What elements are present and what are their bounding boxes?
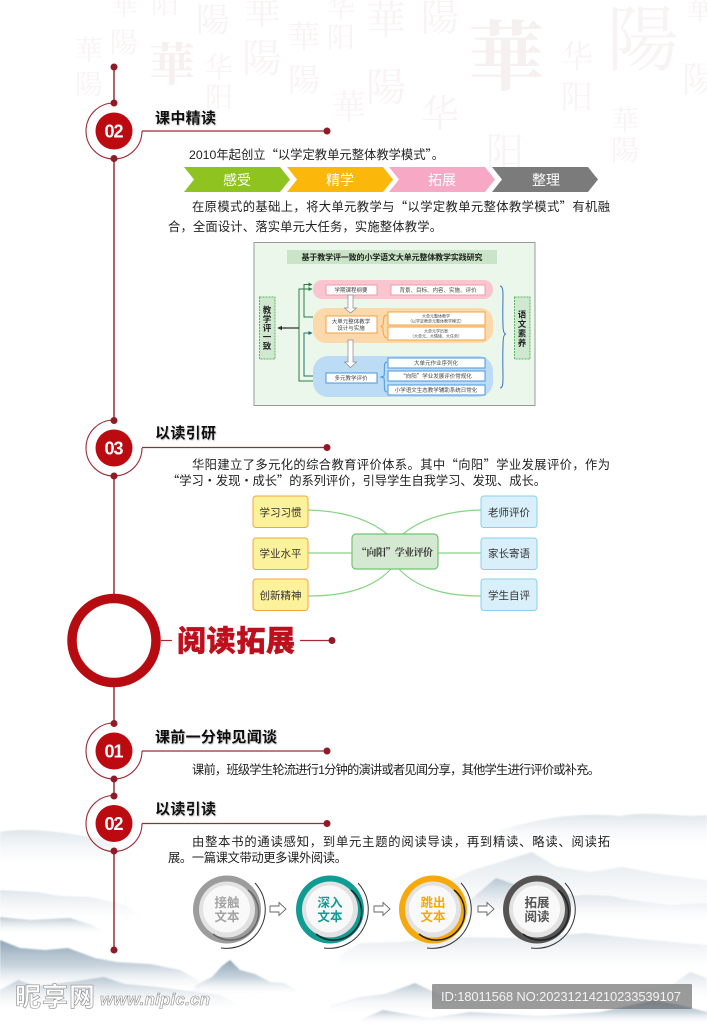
background: calligraphy characters: 陽 [288, 62, 320, 98]
mind map: 向阳学业评价: 家长寄语 [488, 547, 530, 560]
background: calligraphy characters: 華 [468, 17, 544, 101]
chevron process: 拓展 [428, 172, 456, 188]
diagram: 大单元整体教学实践研究: “向阳”学业发展评价常规化 [400, 372, 472, 380]
reading steps: four rings: 文本 [420, 909, 446, 924]
diagram: 大单元整体教学实践研究: 一 [263, 332, 272, 342]
diagram: 大单元整体教学实践研究: 文 [518, 319, 527, 329]
reading steps: four rings: 阅读 [524, 909, 550, 924]
reading steps: four rings: 拓展 [524, 895, 550, 910]
chevron process: 整理 [532, 172, 560, 188]
section marker: 课前一分钟见闻谈 01 [86, 720, 330, 782]
text: 整本书通读 [168, 834, 610, 865]
text: 课前演讲: 课前，班级学生轮流进行1分钟的演讲或者见闻分享，其他学生进行评价或补充。 [192, 762, 600, 777]
text: 2010年起创立: 2010年起创立“以学定教单元整体教学模式”。 [189, 145, 444, 163]
diagram: 大单元整体教学实践研究: 大单元作业序列化 [414, 359, 458, 367]
background: calligraphy characters: 華 [75, 35, 103, 67]
diagram: 大单元整体教学实践研究: 设计与实施 [337, 324, 365, 332]
background: calligraphy characters: 华 [561, 39, 593, 75]
reading steps: four rings [193, 876, 575, 948]
diagram: 大单元整体教学实践研究: （以学定教单元整体教学模式） [408, 318, 464, 324]
background: calligraphy characters: 陽 [607, 1, 679, 81]
diagram: 大单元整体教学实践研究: 基于教学评一致的小学语文大单元整体教学实践研究 [302, 252, 482, 262]
background: calligraphy characters: 陽 [366, 65, 406, 110]
background: calligraphy characters: 阳 [327, 23, 355, 54]
diagram: 大单元整体教学实践研究: 小学语文生态教学辅助系统日常化 [395, 386, 478, 394]
chevron process: 精学 [326, 172, 354, 188]
diagram: 大单元整体教学实践研究: 素 [518, 328, 527, 338]
watermark: image id [432, 984, 692, 1009]
watermark: nipic logo [15, 982, 210, 1012]
background: calligraphy characters: 阳 [205, 83, 233, 114]
section marker: 以读引研 03: 03 [104, 438, 124, 458]
section marker: 课中精读 02: 02 [104, 122, 124, 142]
reading steps: four rings: 接触 [214, 895, 240, 910]
diagram: 大单元整体教学实践研究: （大单元、大情境、大任务） [410, 332, 462, 338]
diagram: 大单元整体教学实践研究: 多元教学评价 [334, 374, 368, 382]
timeline spine [110, 64, 118, 954]
background: calligraphy characters: 陽 [110, 28, 138, 59]
reading steps: four rings: 深入 [317, 895, 343, 910]
chevron process [184, 167, 598, 192]
text: 评价体系 [167, 455, 610, 489]
heading: 课前一分钟见闻谈: 课前一分钟见闻谈 [155, 728, 277, 746]
background: calligraphy characters: 陽 [242, 36, 282, 81]
background: calligraphy characters: 華 [332, 89, 366, 127]
chevron process: 感受 [223, 172, 251, 188]
background: calligraphy characters: 阳 [561, 79, 593, 115]
diagram: 大单元整体教学实践研究: 大单元学历案 [424, 328, 448, 334]
text: 原模式融合: 在原模式的基础上，将大单元教学与“以学定教单元整体教学模式”有机融 [192, 197, 610, 215]
heading: 课中精读: 课中精读 [155, 109, 216, 127]
diagram: 大单元整体教学实践研究: 语 [518, 310, 527, 320]
watermark: image id: ID:18011568 NO:20231214210233539107 [441, 989, 681, 1004]
heading: 以读引读: 以读引读 [155, 801, 216, 818]
watermark: nipic logo: 昵享网 [15, 982, 95, 1012]
background: calligraphy characters [75, 0, 707, 174]
section marker: 以读引读 02: 02 [104, 814, 124, 834]
mind map: 向阳学业评价: 学生自评 [488, 589, 530, 602]
section marker: 以读引研 03 [86, 417, 330, 480]
background: calligraphy characters: 華 [288, 19, 320, 55]
background: ink mountains [0, 814, 707, 1024]
watermark: nipic logo: www.nipic.cn [100, 990, 210, 1009]
section marker: 课前一分钟见闻谈 01: 01 [104, 742, 124, 762]
diagram: 大单元整体教学实践研究: 大单元整体教学 [332, 318, 371, 326]
diagram: 大单元整体教学实践研究: 养 [518, 338, 527, 348]
background: calligraphy characters: 阳 [486, 132, 524, 174]
reading steps: four rings: 文本 [317, 909, 343, 924]
text: 整本书通读: 展。一篇课文带动更多课外阅读。 [168, 850, 347, 865]
diagram: 大单元整体教学实践研究 [254, 242, 535, 406]
diagram: 大单元整体教学实践研究: 背景、目标、内容、实施、评价 [399, 286, 477, 294]
mind map: 向阳学业评价: 创新精神 [260, 589, 302, 602]
background: calligraphy characters: 華 [611, 105, 639, 137]
section marker: 课中精读 02 [86, 100, 330, 162]
mind map: 向阳学业评价: 老师评价 [488, 506, 530, 519]
reading steps: four rings: 跳出 [420, 895, 446, 910]
background: calligraphy characters: 陽 [611, 136, 639, 167]
reading steps: four rings: 文本 [214, 909, 240, 924]
diagram: 大单元整体教学实践研究: 评 [263, 323, 272, 333]
heading: 阅读拓展: 阅读拓展 [177, 625, 295, 658]
section ring: 阅读拓展 [72, 598, 336, 682]
mind map: 向阳学业评价: 学习习惯 [260, 506, 302, 519]
diagram: 大单元整体教学实践研究: 教 [263, 305, 272, 315]
diagram: 大单元整体教学实践研究: 学 [263, 314, 272, 324]
background: calligraphy characters: 陽 [75, 70, 103, 101]
text: 原模式融合 [168, 197, 610, 234]
text: 评价体系: 华阳建立了多元化的综合教育评价体系。其中“向阳”学业发展评价，作为 [192, 455, 610, 473]
mind map: 向阳学业评价: 学业水平 [260, 547, 302, 560]
text: 评价体系: “学习・发现・成长”的系列评价，引导学生自我学习、发现、成长。 [167, 471, 546, 489]
diagram: 大单元整体教学实践研究: 学期课程纲要 [334, 286, 368, 294]
diagram: 大单元整体教学实践研究: 大单元整体教学 [422, 312, 450, 318]
diagram: 大单元整体教学实践研究: 致 [263, 341, 272, 351]
text: 整本书通读: 由整本书的通读感知，到单元主题的阅读导读，再到精读、略读、阅读拓 [192, 834, 610, 849]
background: calligraphy characters: 华 [205, 52, 233, 84]
heading: 以读引研: 以读引研 [155, 425, 216, 442]
background: calligraphy characters: 華 [149, 40, 195, 91]
background: calligraphy characters: 陽 [196, 3, 230, 40]
text: 原模式融合: 合，全面设计、落实单元大任务，实施整体教学。 [168, 219, 442, 234]
background: calligraphy characters: 华 [421, 94, 459, 136]
mind map: 向阳学业评价 [253, 496, 537, 610]
section marker: 以读引读 02 [86, 792, 331, 854]
mind map: 向阳学业评价: “向阳”学业评价 [357, 544, 433, 559]
